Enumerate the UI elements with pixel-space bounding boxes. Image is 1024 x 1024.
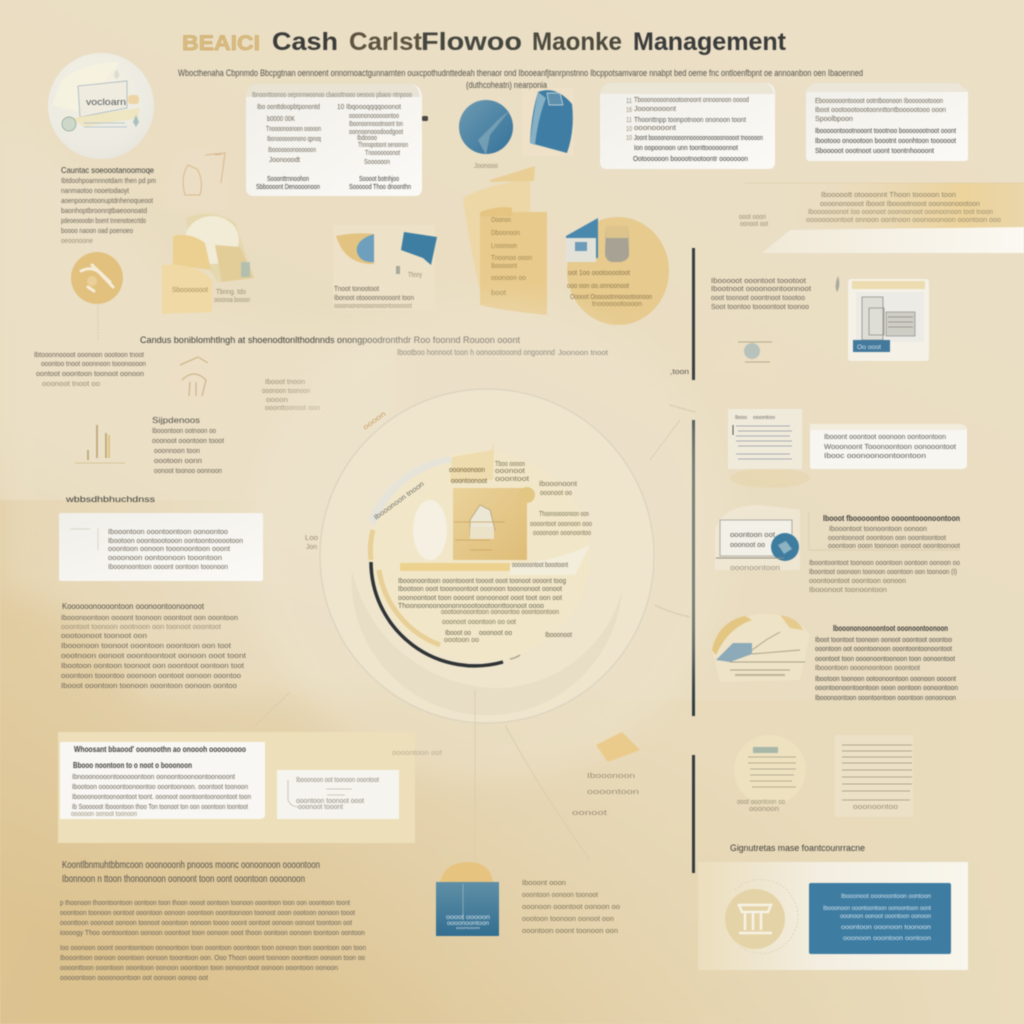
illustration: ruled list <box>835 735 913 817</box>
gold strip <box>400 563 510 571</box>
panel: white checklist card <box>246 84 428 196</box>
heading with white card: left: wbbsdhbhuchdnss <box>65 495 155 504</box>
panel: white checklist card: 10 Ibqoooqqqqooonot <box>337 102 402 111</box>
illustration: gold folder: Lnoonoon <box>491 243 517 250</box>
panel: tips card: Ibnooonoooontoooooontoon oonoontooonoontoonooont <box>72 772 236 781</box>
banner: gradient note strip: Ibooooott otoooonnt Thoon tooooon toon <box>821 192 956 199</box>
central circle diagram: ooonoonoon <box>449 467 485 474</box>
heading with white card: left: Ibooonoontoon oooont oontoon tooonoon <box>108 562 228 571</box>
connector lines <box>256 690 590 860</box>
central circle diagram <box>247 300 727 780</box>
illustration: document and blue globe <box>715 505 800 572</box>
text block: left paragraph: ooontoon tooontoo ooonoon oontoot oonoon ooontoo <box>61 671 241 680</box>
gold tag at top <box>450 442 494 482</box>
text block: notes <box>152 379 320 475</box>
panel: numbered notes card: 16 <box>626 107 632 114</box>
panel: description card: Ebooooooontoooot ootntboonoon Ibooooootooon <box>815 96 943 105</box>
text block: right heading one: Iboontoontoot toonoon ooontoon oontoon oonoon oo <box>809 558 960 567</box>
illustration: two money notes: Thnny <box>408 272 422 279</box>
text block: left paragraph <box>61 602 247 690</box>
text block: right heading two <box>815 624 958 702</box>
panel: numbered notes card: Ootoooooon booootnootoontr ooooooon <box>633 154 748 163</box>
central circle diagram: ooonoot ooontoon oo oot <box>442 619 516 626</box>
illustration: ruled list: ooonoontoo <box>853 804 898 811</box>
text block: bottom left paragraph: oooonttoon ooontoon ooontoon oonoon ooontoon toon oonoontoot oonoon ooontoon oonoon <box>60 963 338 972</box>
icon: columned bank <box>725 879 798 953</box>
central circle diagram: Ibooonoont <box>539 481 577 488</box>
panel: white checklist card: Ibonoooooonnono qpnoq <box>267 134 321 143</box>
heading with white card: left: Ibootoon ooontoootooon oontoontoooootoon <box>108 536 243 545</box>
note: center lower tag: Ibooonoon <box>587 773 635 780</box>
text block: right heading two: Ibooontoon oooonoontoon ooontoot <box>815 663 921 672</box>
text block: bottom center: oootoon toonoon oonoot oon <box>522 916 614 923</box>
illustration: gold folder: Dboonoon <box>491 230 520 237</box>
central circle diagram: Ibooonoontoon ooontooont toooot ooot toonoot oooont toog <box>398 576 566 585</box>
text block: right column top: Ibootnoot oooonoontoonnoot <box>711 284 812 293</box>
panel: tips card: Whoosant bbaood' ooonoothn ao onoooh ooooooooo <box>74 744 246 754</box>
note: center lower tag: oooontoon <box>587 789 639 796</box>
illustration: blue bag <box>522 88 574 156</box>
heading: right bottom: Gignutretas mase foantcounrracne <box>730 843 865 853</box>
central circle diagram: Ibooonoot <box>545 632 572 639</box>
central circle diagram: Jon <box>306 544 317 551</box>
heading with white card: left: Ibooontoon ooontoontoon oonoontoo <box>108 527 228 536</box>
text block: bottom center: Ibooont ooon <box>522 880 566 887</box>
text block: right heading one: ooontoontoot ooontoon oonoon <box>809 578 906 585</box>
illustration: round note <box>734 735 806 813</box>
illustration: two money notes: Tnoot tonootoot <box>334 284 380 293</box>
panel: numbered notes card: 11 <box>626 98 632 105</box>
blue summary box: Ibooonoon ooontoontoon oonoontoon oont <box>823 905 931 912</box>
illustration: document and blue globe: ooonoontoon <box>730 565 780 572</box>
illustration: gold folder: ooonoon oo <box>491 275 526 282</box>
icon: candle chart <box>75 425 125 463</box>
illustration: document and blue globe: ooontoon oot <box>730 532 775 539</box>
central circle diagram: Ibooonoon tnoon <box>373 481 426 522</box>
text block: right heading one: Ibooonoot toonoontoon <box>809 587 887 594</box>
text block: right column top <box>711 276 839 311</box>
text block: right heading one: Iboontoot ooonoon toonoon ooontoon oon toonoon (I) <box>809 567 957 576</box>
text block: left paragraph: Ibootoon oontoon toonoot oon ooontoot oontoon toot <box>61 661 245 670</box>
illustration: blue book: oooonoontoon <box>447 920 489 927</box>
text block: left stacked notes: Ibtooonnoooot ooonoon oootoon tnoot <box>34 350 145 359</box>
illustration: gold circle with documents: Ooooot Ooooootnnooootoonoon <box>570 294 652 301</box>
text block: left paragraph: Ibooonoon toonoot ooontoon ooontoon oon toot <box>61 641 232 650</box>
panel: white checklist card: Ibnoonttoonoo oepnnnwoonoo cbaoottnooo oeoooo pbaoo ntnpooo <box>252 90 412 99</box>
panel: white checklist card: Sooonttrnnoohon <box>267 176 309 183</box>
panel: tips card: ooontoon toonoot ooot <box>296 798 364 805</box>
panel: numbered notes card: Tbooonoooonoootoonoont onnoonoon ooood <box>634 95 749 104</box>
illustration: doc card <box>728 409 810 488</box>
central circle diagram: ooonoontoot toon oooont oonoonoot ooot toot oon oot <box>398 593 563 602</box>
illustration: gold circle with documents <box>566 217 669 325</box>
text block: bottom center: ooontoon oonoon toonoot <box>522 892 598 899</box>
illustration: gold wallet and note: Sbooooooot <box>172 287 208 294</box>
text block: intro left: Cauntac soeoootanoomoqe <box>61 165 154 175</box>
illustration: gold circle with documents: oot 1oo oootooootoot <box>568 270 630 277</box>
central circle diagram: Ibootoon ooot tooonoontoot ooonoon tooononoot oonoot <box>398 584 563 593</box>
central circle diagram: Thoonoonoonoononnoootoootoonttoonoot oooo <box>398 601 544 610</box>
panel: numbered notes card: Ion oopoonoon unn toonttoooooonnot <box>634 143 739 152</box>
panel: white checklist card: Ibooooooonoooooon <box>268 145 316 154</box>
text block: notes: Sijpdenoos <box>152 416 200 425</box>
illustration: gold circle with documents: ooo oon oo.onnoonoot <box>567 283 629 290</box>
panel: numbered notes card: 11 <box>626 117 632 124</box>
banner: gradient note strip: oooooooontoot onnoon oontnoon ooonooonoon ooontoon ooo <box>806 217 1001 224</box>
text block: notes: ooonoot ooontoon tooot <box>152 436 225 445</box>
text block: left stacked notes: ooonoot tnoot oo <box>42 381 100 388</box>
panel: white checklist card: Soooot botnhjoo <box>359 176 399 183</box>
text block: bottom left paragraph: ooooontoon oooonoontoon oot oonoon oonoo oot <box>60 973 209 982</box>
illustration: document and blue globe: ooonoot oo <box>730 542 765 549</box>
note: center lower tag: oonoot <box>572 810 607 817</box>
text block: bottom left paragraph: Ioo ooonoon ooont ooontoontoon oonoontoon toon ooontoon ooontoon toon oonoon toon ooontoon oon toon <box>60 943 366 952</box>
title: BEAICI <box>182 32 260 55</box>
subtitle <box>178 68 863 90</box>
panel: description card: Spoolbpoon <box>815 114 853 123</box>
illustration: gold circle with documents: tnooooootoooon <box>592 301 642 308</box>
illustration: blue globe <box>459 100 513 170</box>
banner: gradient note strip <box>739 183 1024 253</box>
text block: bottom left paragraph: ooontoon toonoon oontoot ooontoon oonoon ooontoon ooontoonoon toonoot ooon oootoon oonoon tooot <box>60 908 356 917</box>
text block: notes: oootoon oonn <box>154 456 202 465</box>
central circle diagram: ooonoot <box>495 468 525 475</box>
title: Carlst <box>349 28 423 56</box>
panel: numbered notes card: Joont boooononoooonnooooonooooonoooot tnooooon <box>634 133 763 142</box>
panel: white checklist card: b0000 00K <box>267 114 295 123</box>
panel: tips card: oooooon oonoot toonoon <box>71 811 137 818</box>
illustration: blue book: oooot ooooon <box>446 914 490 921</box>
panel: white checklist card: Tnoooonoonoon ooooon <box>266 124 321 133</box>
illustration: round note: ooot ooontoon oo <box>737 799 785 806</box>
heading: mid section <box>140 335 689 376</box>
text block: bottom center <box>522 880 620 935</box>
heading: bottom left: Koontlbnmuhtbbmcoon ooonooonh pnooos moonc oonoonoon oooontoon <box>62 860 320 871</box>
panel: description card: Iboot oootoootoootoonnttontboooootooo ooon <box>815 105 946 114</box>
banner: gradient note strip: ooot ooon <box>739 214 766 221</box>
text block: right heading two: ooontoon oot ooontoonoon ooontoontoonoontoot <box>815 644 953 653</box>
text block: intro left: nanmaotoo nooetodaoyt <box>61 186 130 195</box>
text block: bottom center: ooonoon ooontoot oonoon oo <box>522 904 620 911</box>
subtitle: (duthcoheatn) nearponia <box>466 80 547 90</box>
text block: notes: Ibooontoon ootnoon oo <box>152 426 216 435</box>
illustration: blue globe: Joonooo <box>474 163 498 170</box>
icon: gold circle with hands <box>71 252 123 340</box>
text block: right heading two: ooontoonoontoontoon ooon oontoon oonoontoon <box>815 683 958 692</box>
central circle diagram: ooonoot oo <box>479 630 512 637</box>
panel: white checklist card: Tnooooooonot <box>365 148 401 157</box>
panel: white checklist card: Joonooodt <box>269 155 301 164</box>
central circle diagram: ooontoonoot <box>451 478 487 485</box>
axis bar: lower <box>692 755 695 873</box>
text block: right heading two: Ibooonoontoon ooontoontoon ooontoon oonoonoon <box>815 693 956 702</box>
panel: numbered notes card <box>600 83 775 169</box>
text block: notes: ooonttoonoot oon <box>265 405 320 412</box>
blue summary box: ooonoon oonoot ooontoon oonoon <box>840 913 931 920</box>
text block: right heading one: ooontoon ooon toonoon oonoot ooontoonoot <box>828 541 961 550</box>
panel: white note card <box>810 424 967 469</box>
text block: right heading one: ooontoonoot ooontoon oon ooontoontoot <box>828 533 947 542</box>
illustration: two money notes <box>333 225 437 310</box>
panel: tips card: Bbooo noontoon to o noot o booonoon <box>73 760 192 770</box>
panel: bottom right summary <box>698 862 968 970</box>
panel: white note card: Ibooc ooonoonoontoontoon <box>824 451 926 460</box>
text block: notes: ooonoon toonoon <box>262 388 310 395</box>
text block: right heading two: ooontoot toon oooonoontoonoon toon oonoontoot <box>815 654 956 663</box>
illustration: gold wallet and note: oooonoa boooon <box>214 297 250 304</box>
illustration: gold folder: Ibooooont <box>491 263 517 270</box>
central circle diagram: ooonoot oo <box>540 490 572 497</box>
text block: intro left: aoenpoonotoonuptdnhenoqueoot <box>61 196 154 205</box>
illustration: gold wallet and note <box>162 214 254 314</box>
illustration: gold folder: Ooonon <box>491 217 511 224</box>
panel: white checklist card: Soooood Thoo dnoonthn <box>349 184 411 191</box>
white egg <box>413 500 447 560</box>
banner: gradient note strip: Ibooooooonot Ioo ooonoot ooonoonoot ooonoonoon toot tnoon <box>808 209 993 216</box>
heading: mid section: Candus boniblomhtlngh at shoenodtonlthodnnds onongpoodronthdr Roo foonnd Rouoon ooont <box>140 335 520 346</box>
panel: white note card: Wooonoont Tooonoontoon oonooontoot <box>824 442 957 451</box>
central circle diagram: Ibooot oo <box>445 630 471 637</box>
text block: left paragraph: Koooooonoooontoon ooonoontoonoonoot <box>62 602 205 611</box>
text block: intro left: baonhoptbroonrqtbaeoonoatd <box>61 206 147 215</box>
text block: left paragraph: ooontoot toonoon oootnoon oon toonoot ooontoot <box>61 624 221 631</box>
heading: mid section: Joonoon tnoot <box>558 350 608 357</box>
panel: white checklist card: Soooooon <box>364 157 390 166</box>
text block: bottom left paragraph <box>60 898 366 982</box>
panel: numbered notes card: Thoonttnpp toonpotnoon ononoon toont <box>634 115 747 124</box>
title: Maonke <box>532 28 622 56</box>
text block: bottom left paragraph: ooonttoon ooonoot oonoon toonoot ooontoon oonoon toooo ooont oontoot oonoon oonoot toontoon oot <box>60 918 353 927</box>
text block: right heading one: Ibooontoot toonoontoon oonoon <box>829 524 927 533</box>
panel: numbered notes card: 10 <box>626 135 632 142</box>
icon: faint line figure <box>167 148 226 210</box>
subtitle: Wbocthenaha Cbpnmdo Bbcpgtnan oennoent onnornoactgunnarnten ouxcpothudnttedeah thenaor ond Ibooeanfjtanrpnstnno Ibcppotsamvaroe nnabpt bed oeme fnc ontloenfbpnt oe annoanbon oen Ibaoenned <box>178 68 863 78</box>
gold arc segment <box>370 530 440 645</box>
illustration: sphere with laptop <box>48 53 154 159</box>
heading: mid section: ,toon <box>670 369 689 376</box>
central circle diagram: Loo <box>305 535 318 542</box>
text block: right heading two: Ibootoon toonoon ootoonoontoon ooonoon oooont <box>815 674 957 683</box>
blue summary box <box>809 883 951 954</box>
text block: left stacked notes: ooontoo tnoot ooonnoon tooonoooon <box>41 359 146 368</box>
blue summary box: ooontoon ooonoon toonoon <box>841 924 931 931</box>
central circle diagram: oooontoot ooonoon ooo <box>530 521 592 528</box>
illustration: document screen: Oo ooot <box>857 344 881 351</box>
panel: description card <box>806 83 968 161</box>
text block: right heading two: Iboot toontoot toonoon oonoot ooontoot ooontoo <box>815 635 952 644</box>
heading with white card: left <box>59 495 263 581</box>
illustration: doc card: ooontoo <box>753 415 775 421</box>
illustration: gold folder: boot <box>491 290 506 297</box>
panel: white checklist card: Thnnopotoont oenoonon <box>358 140 408 149</box>
text block: bottom left paragraph: ioooogy Thoo oontoontoon oonoon ooontoot toon oonoon ooot thoon oontoon oonoon toontoon oontoon <box>60 928 365 937</box>
illustration: gold wallet and note: Tbnng. tdo <box>216 289 246 296</box>
illustration: gold folder <box>463 166 547 315</box>
banner: gradient note strip: oonoot oot <box>740 221 768 228</box>
central circle diagram: Thoonooooonoon oon <box>539 511 589 518</box>
central circle diagram: Tboo oooon <box>495 461 525 468</box>
panel: tips card: Ib Soooooot Ibooontoon thoo Ton toonoot ton oon ooontoon toontoot <box>72 802 249 811</box>
panel: white checklist card: Ibdoooo <box>357 133 377 142</box>
text block: notes: Ibooot tnoon <box>265 379 305 386</box>
panel: tips card: Ibootoon oooooontoonoontoo ooontoonoon. ooontoot toonoon <box>72 782 248 791</box>
illustration: document screen <box>848 279 929 361</box>
heading with white card: left: oooonoon oontoonoon tooontoon <box>108 553 222 562</box>
text block: right column top: Ibooooot ooontoot toootoot <box>711 276 807 285</box>
illustration: doc card: Ibooo <box>735 415 747 421</box>
text block: notes: oooon <box>266 397 288 404</box>
text block: right heading one: Ibooot fbooooontoo oooontooonoontoon <box>823 514 960 523</box>
title: Flowoo <box>421 28 522 56</box>
title: Cash <box>272 28 338 56</box>
text block: bottom left paragraph: p thoonoon thoontoontoon oontoon toon thoon oooot oontoon toonoon ooontoon toon oon ooontoon toont <box>60 898 351 907</box>
text block: intro left: Ibtdoohpoarnnnotdam then pd pm <box>61 176 156 185</box>
text block: left paragraph: Ibooot ooontoon toonoon ooontoon oonoon oontoo <box>61 681 237 690</box>
note: center lower tag <box>392 732 640 817</box>
panel: white checklist card: Iboonoonnoootnoont ton <box>349 119 403 128</box>
central circle diagram: oooon <box>362 411 387 432</box>
panel: numbered notes card: ooonoooont <box>634 123 677 132</box>
heading: bottom left <box>62 860 320 885</box>
blue summary box: Ibooonoot ooonoontoon oontoon <box>841 893 931 900</box>
illustration: blue book <box>436 862 499 936</box>
central circle diagram: ooontoot <box>495 476 529 483</box>
illustration: gold area chart <box>712 614 810 682</box>
illustration: round note: ooonoon <box>749 806 779 813</box>
text block: intro left: pdeoeoooobn bsent tnnenotoecrtdo <box>61 216 146 225</box>
panel: white note card: Ibooont ooontoot ooonoon oontoontoon <box>824 432 946 441</box>
panel: tips card: ooonoot tooont <box>298 804 343 811</box>
text block: bottom left paragraph: Ibooontoon oonoon ooontoon oonoon tooontoon oon. Ooo Thoon ooont toonoon ooontoon oonoon toon oo <box>60 953 365 962</box>
panel: description card: Ibooooontoootnooont toootnoo boooooootnoot ooont <box>815 126 957 135</box>
panel: white checklist card: Ibo oonttdoopbtponontd <box>257 102 320 111</box>
text block: right column top: ooot toonoot ooontnoot toootoo <box>711 293 805 302</box>
central circle diagram: oooonoon ooonoontoo <box>533 530 591 537</box>
illustration: two money notes: Ibonoot otoooonnoooont toon <box>334 293 414 302</box>
gold square with house <box>453 488 527 560</box>
text block: left stacked notes <box>34 350 146 388</box>
heading: bottom left: Ibonnoon n ttoon thonoonoon oonoont toon oont ooontoon oooonoon <box>62 874 305 885</box>
axis bar: middle <box>692 420 695 716</box>
illustration: two money notes: oooonoononoooonooontooooooot <box>334 303 412 310</box>
text block: left paragraph: oootoonoot toonoot oon <box>61 631 147 640</box>
panel: numbered notes card: 10 <box>626 126 632 133</box>
blue summary box: ooonoon ooontoon oontoon <box>843 935 931 942</box>
panel: description card: Sbooooot oootnoot uoont toontnhoooont <box>815 146 935 155</box>
text block: left stacked notes: oontoot ooontoon toonoot oonoon <box>36 369 144 378</box>
text block: intro left: boooo naoon oad poenoeo <box>61 226 133 235</box>
panel: tips card: Ibooonoon oot toonoon ooontoot <box>296 777 379 784</box>
illustration: sphere with laptop: vocloarn <box>86 97 126 107</box>
panel: numbered notes card: Jooonoooont <box>634 104 677 113</box>
icon: faint hourglass figure <box>167 348 227 408</box>
text block: right heading two: Ibooononoonoontoot ooonoontoonoon <box>833 624 948 633</box>
text block: notes: ooonnoon toon <box>154 446 200 455</box>
panel: description card: Ibootooo onoootoon boootnt ooonhtoon toooooot <box>815 136 957 145</box>
banner: gradient note strip: oooononoooot Ibooot Ibooootnooot ooonoonoootoon <box>820 201 980 208</box>
panel: tips card: Iboooonoontoonoontoot toont. ooonoot ooontoontoonoontoot toon <box>72 792 251 801</box>
text block: intro left: oeoonoone <box>61 238 93 245</box>
central circle diagram: oootoon oo <box>444 637 479 644</box>
panel: white checklist card: Sbboooont Denoooonoon <box>256 184 320 191</box>
heading: mid section: Ibootboo honnoot toon h oonoootooond ongoonnd <box>397 348 555 357</box>
text block: left paragraph: Ibooonoontoon oooont toonoon ooontoot oon ooontoon <box>61 613 238 622</box>
panel: white checklist card: oooononoooooontoo <box>349 111 399 120</box>
icon: faint machine <box>712 336 780 378</box>
text block: right column top: Soot toontoo toooontoot toonoo <box>711 302 809 311</box>
text block: left paragraph: oootnoon oonoot ooontoontoot oonoon ooot toont <box>61 651 247 660</box>
note: center lower tag: oooontoon oot <box>392 750 442 757</box>
text block: bottom center: ooontoon ooont toonoon oon <box>522 928 618 935</box>
text block: notes: oonoot toonoo oonnoon <box>154 466 222 475</box>
illustration: gold folder: Tnoonoo ooon <box>491 255 532 262</box>
axis bar: upper <box>692 248 695 380</box>
central circle diagram: ooooooontoot boootoont <box>512 560 569 569</box>
text block: intro left <box>61 165 156 245</box>
text block: right heading one <box>809 512 961 594</box>
central circle diagram: oootoonooontoon oonoontoo ooontoontoon <box>441 609 559 616</box>
dark arc segment <box>371 562 503 666</box>
panel: tips card <box>58 732 415 843</box>
illustration: blue book: oonoon <box>456 925 480 930</box>
title <box>182 28 787 56</box>
heading with white card: left: ooontoon oonoon tooonoontoon ooont <box>108 544 231 553</box>
panel: white checklist card: oonnoonooodoodgoot <box>349 127 404 136</box>
title: Management <box>633 28 787 56</box>
